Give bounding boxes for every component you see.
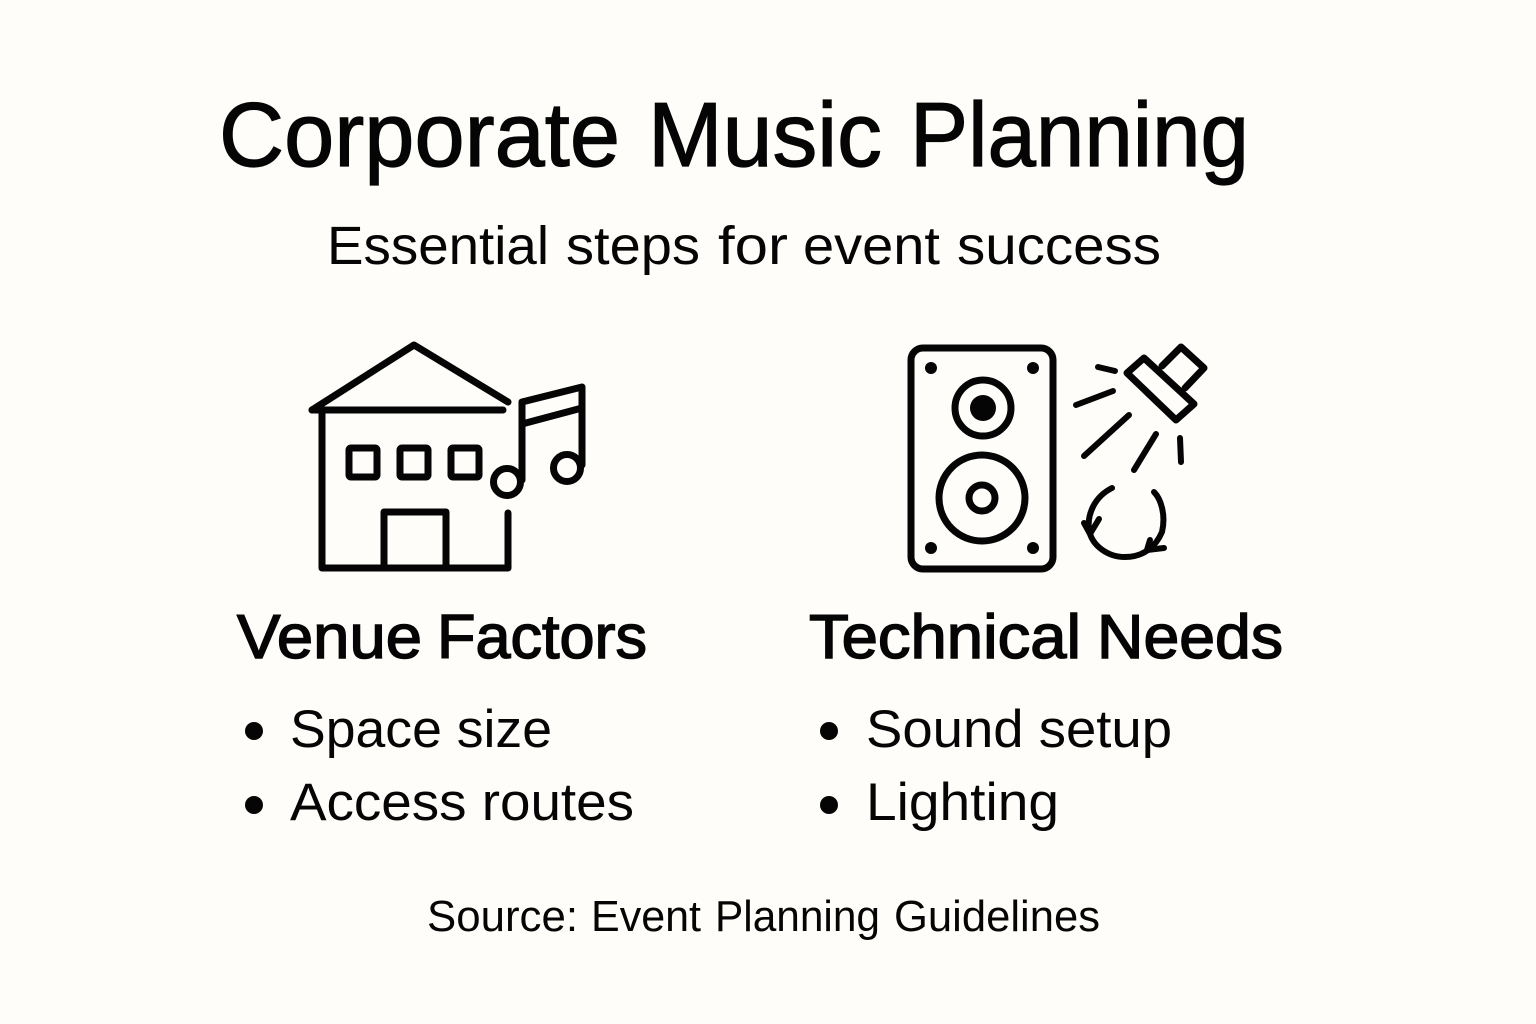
subtitle: steps (566, 216, 700, 276)
list: technical needs (820, 700, 1172, 832)
list: venue factors: Access routes (290, 773, 634, 832)
icon: circular arrow (1084, 488, 1164, 557)
subtitle: Essential (327, 216, 549, 276)
icon: spotlight with light rays (1076, 347, 1204, 470)
source note: Source: (427, 892, 578, 941)
source note: Event (591, 892, 701, 941)
list: technical needs: Lighting (866, 773, 1059, 832)
heading: venue factors: Factors (437, 603, 647, 672)
heading: technical needs: Technical (809, 603, 1081, 672)
heading: technical needs: Needs (1097, 603, 1283, 672)
subtitle: success (957, 216, 1161, 276)
title: Music (648, 85, 882, 186)
panel: venue factors (237, 345, 647, 832)
title: Corporate (219, 85, 620, 186)
list: venue factors (245, 700, 634, 832)
source note: Planning (715, 892, 880, 941)
subtitle: for (718, 216, 788, 276)
list: venue factors: Space size (290, 700, 552, 759)
list: technical needs: Sound setup (866, 700, 1172, 759)
icon: speaker (911, 348, 1053, 569)
heading: venue factors: Venue (237, 603, 422, 672)
icon: venue building with music note (312, 345, 582, 568)
source note: Guidelines (894, 892, 1100, 941)
panel: technical needs (809, 347, 1283, 832)
title: Planning (910, 85, 1249, 186)
subtitle: event (803, 216, 940, 276)
